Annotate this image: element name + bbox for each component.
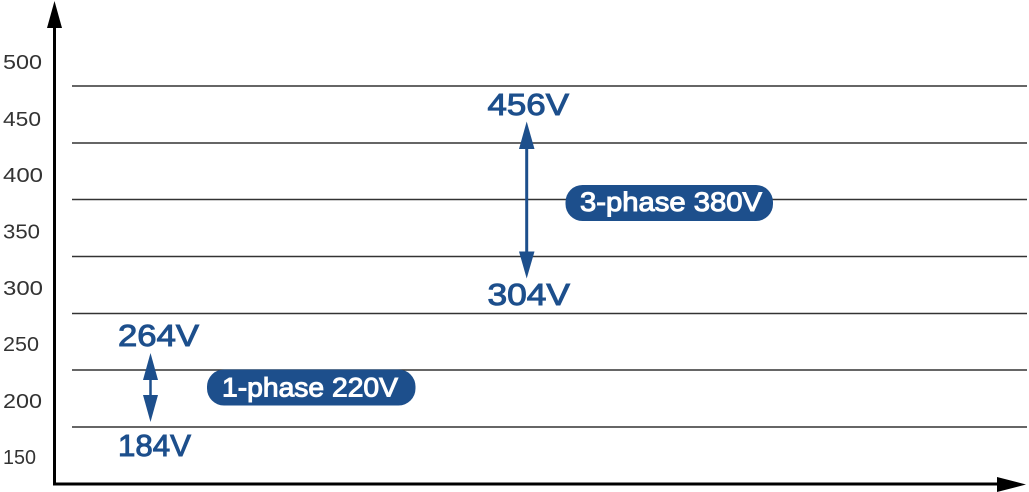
y-axis arrow xyxy=(47,1,62,485)
y-axis labels: 250 xyxy=(3,333,39,356)
grid lines xyxy=(72,86,1027,427)
y-axis labels: 300 xyxy=(3,277,43,300)
y-axis labels: 450 xyxy=(3,108,41,131)
1-phase range xyxy=(118,318,416,463)
label: 184V: 184V xyxy=(118,428,191,463)
y-axis labels xyxy=(3,51,43,469)
label: 264V: 264V xyxy=(118,318,199,353)
arrow: 184V to 264V xyxy=(143,353,158,422)
badge: 3-phase 380V: 3-phase 380V xyxy=(580,187,762,217)
arrow: 304V to 456V xyxy=(519,122,534,278)
label: 304V: 304V xyxy=(488,277,570,312)
badge: 1-phase 220V xyxy=(207,370,416,406)
y-axis labels: 150 xyxy=(3,446,36,469)
label: 456V: 456V xyxy=(488,87,569,122)
x-axis arrow xyxy=(53,477,1026,492)
y-axis labels: 400 xyxy=(3,164,43,187)
badge: 1-phase 220V: 1-phase 220V xyxy=(222,372,398,402)
3-phase range xyxy=(488,87,773,312)
y-axis labels: 200 xyxy=(3,390,42,413)
badge: 3-phase 380V xyxy=(566,185,773,221)
y-axis labels: 500 xyxy=(3,51,42,74)
y-axis labels: 350 xyxy=(3,220,40,244)
